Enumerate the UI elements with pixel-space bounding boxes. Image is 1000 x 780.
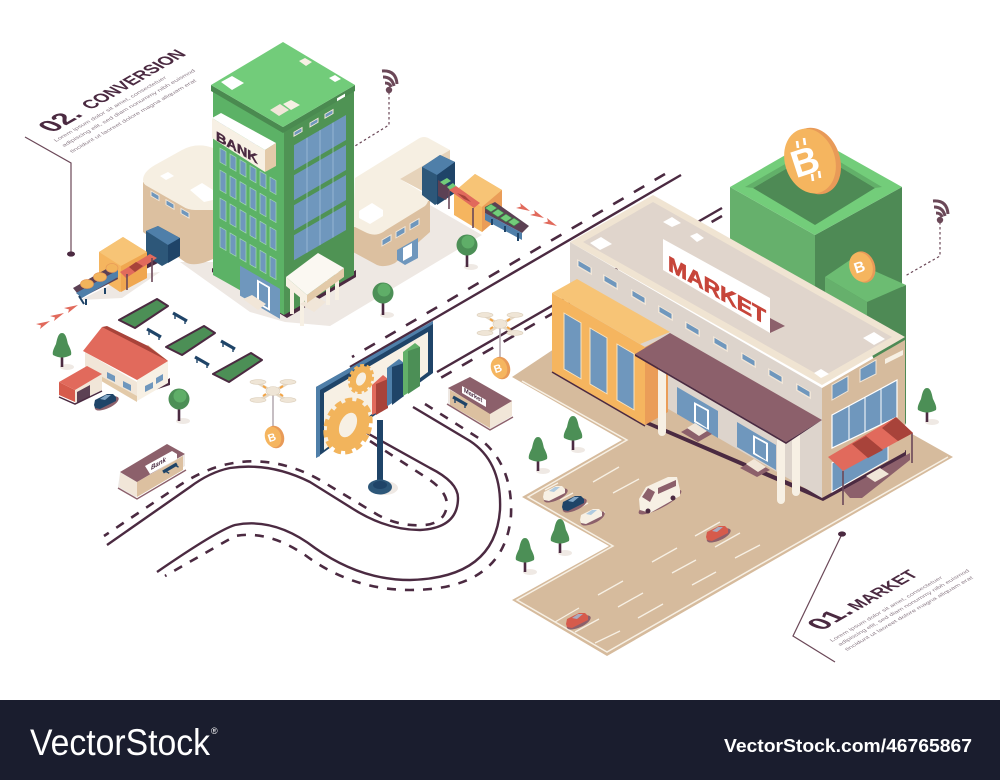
- large bitcoin coin: [776, 121, 849, 201]
- plaza benches: [147, 313, 235, 368]
- bus stop market: [447, 377, 513, 430]
- market sign: [663, 239, 785, 333]
- billboard bars: [372, 343, 420, 415]
- callout 02 conversion: 02.: [30, 106, 90, 135]
- wifi signal bank: [355, 71, 397, 146]
- bank left wall windows: [220, 121, 280, 319]
- blue car: [93, 393, 121, 413]
- orange wing: [552, 279, 670, 426]
- callout 01 market: 01.: [799, 603, 860, 633]
- bus stop bank: Bank: [151, 456, 167, 472]
- callout 01 market: MARKET: [842, 567, 923, 613]
- callout 02 conversion: adipiscing elit, sed diam nonummy nibh euismod: [61, 68, 198, 148]
- callout 02 conversion: Lorem ipsum dolor sit amet, consectetuer: [53, 75, 168, 143]
- pale ground plot around bank: [80, 205, 482, 326]
- watermark bar: VectorStock.com/46765867: [724, 736, 972, 756]
- garage: [59, 366, 102, 404]
- direction arrows: [36, 203, 557, 329]
- bus stop market: Market: [464, 387, 483, 405]
- market doors: [677, 387, 776, 477]
- bank roof vents: [221, 58, 341, 116]
- drone right with coin: [477, 313, 523, 382]
- callout 01 market: tincidunt ut laoreet dolore magna aliquam erat: [844, 575, 975, 652]
- beige factory right: [353, 137, 450, 266]
- billboard gears: [318, 362, 378, 459]
- watermark bar: VectorStock: [30, 722, 210, 763]
- watermark bar: ®: [211, 726, 218, 736]
- red shop awning: [828, 417, 913, 505]
- callout 02 conversion: [25, 47, 198, 257]
- bank sign: [212, 113, 276, 172]
- entrance awning: [635, 333, 822, 500]
- house: [83, 326, 170, 402]
- bus stop bank: [118, 444, 186, 499]
- drone left with coin: [250, 380, 296, 451]
- bank sign: BANK: [216, 128, 258, 167]
- roads: [104, 174, 722, 590]
- parking lot: [512, 345, 953, 656]
- small bitcoin coin: [845, 248, 879, 286]
- market roof: [570, 195, 905, 385]
- market building: [552, 195, 913, 505]
- callout 01 market: Lorem ipsum dolor sit amet, consectetuer: [829, 575, 944, 643]
- watermark bar: [0, 700, 1000, 780]
- bank canopy: [286, 253, 344, 326]
- billboard: [316, 321, 433, 495]
- market sign: MARKET: [668, 251, 766, 330]
- small bitcoin coin: B: [852, 258, 868, 277]
- left conveyor with coins: [73, 226, 180, 305]
- parked cars: [542, 485, 733, 632]
- market side windows: [832, 350, 903, 492]
- green vault building: [730, 138, 906, 425]
- plaza lawns: [119, 299, 262, 382]
- van: [636, 477, 684, 519]
- market upper windows: [577, 259, 811, 399]
- beige factory left: [143, 145, 215, 264]
- callout 01 market: [793, 531, 975, 662]
- small green block: [825, 277, 867, 340]
- right conveyor with banknotes: [422, 155, 529, 241]
- bank tower: [211, 42, 356, 326]
- drone right with coin: B: [492, 362, 504, 376]
- callout 02 conversion: CONVERSION: [76, 47, 191, 112]
- drone left with coin: B: [266, 431, 278, 445]
- conical trees: [53, 333, 939, 575]
- bank right wall windows: [294, 93, 346, 260]
- round trees: [168, 234, 478, 424]
- bank entrance steps: [243, 295, 266, 310]
- callout 02 conversion: tincidunt ut laoreet dolore magna aliquam erat: [69, 78, 198, 154]
- wifi signal market: [905, 201, 948, 276]
- large bitcoin coin: B: [786, 138, 825, 187]
- callout 01 market: adipiscing elit, sed diam nonummy nibh euismod: [837, 568, 972, 647]
